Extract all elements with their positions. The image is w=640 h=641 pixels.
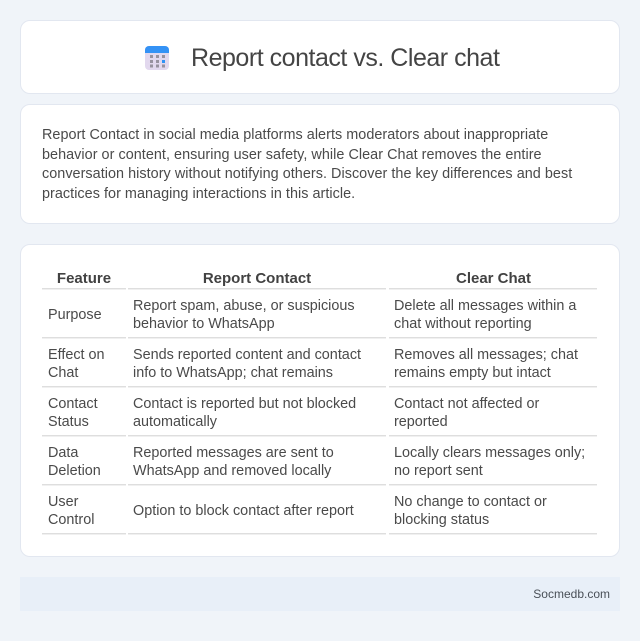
row: user control: Option to block contact after report: [133, 503, 354, 519]
row: contact status: [48, 396, 540, 430]
row: effect on chat: Chat: [48, 365, 78, 381]
row: purpose: Report spam, abuse, or suspicious: [133, 298, 355, 314]
table header: Feature: [57, 270, 111, 287]
row: data deletion: [48, 445, 585, 479]
table header: [57, 270, 531, 287]
row: purpose: Purpose: [48, 307, 102, 323]
title: Report contact vs. Clear chat: [191, 44, 499, 72]
row: data deletion: Data: [48, 445, 78, 461]
table header: Clear Chat: [456, 270, 531, 287]
row: data deletion: Locally clears messages only;: [394, 445, 585, 461]
row: user control: Control: [48, 512, 94, 528]
row: effect on chat: [48, 347, 578, 381]
row: purpose: [48, 298, 576, 332]
row: purpose: Delete all messages within a: [394, 298, 576, 314]
row: user control: [48, 494, 547, 528]
intro paragraph: practices for managing interactions in this article.: [42, 186, 355, 202]
row: purpose: behavior to WhatsApp: [133, 316, 275, 332]
row: data deletion: Reported messages are sent to: [133, 445, 334, 461]
table header: Report Contact: [203, 270, 311, 287]
row: effect on chat: Removes all messages; chat: [394, 347, 578, 363]
intro paragraph: behavior or content, ensuring user safety, while Clear Chat removes the entire: [42, 146, 542, 162]
intro paragraph: [42, 127, 572, 202]
row: effect on chat: info to WhatsApp; chat remains: [133, 365, 333, 381]
footer source label: Socmedb.com: [533, 587, 610, 601]
row: effect on chat: remains empty but intact: [394, 365, 551, 381]
row: effect on chat: Sends reported content and contact: [133, 347, 361, 363]
intro paragraph: conversation history without notifying others. Discover the key differences and best: [42, 166, 572, 182]
row: data deletion: no report sent: [394, 463, 483, 479]
row: user control: No change to contact or: [394, 494, 547, 510]
row: contact status: Status: [48, 414, 89, 430]
icon: calendar: [145, 46, 169, 70]
intro paragraph: Report Contact in social media platforms alerts moderators about inappropriate: [42, 127, 548, 143]
row: user control: User: [48, 494, 78, 510]
row: effect on chat: Effect on: [48, 347, 105, 363]
row: data deletion: Deletion: [48, 463, 101, 479]
row: contact status: Contact is reported but not blocked: [133, 396, 356, 412]
panel: title card: [20, 20, 620, 94]
row: contact status: Contact not affected or: [394, 396, 539, 412]
row: contact status: Contact: [48, 396, 98, 412]
row: data deletion: WhatsApp and removed locally: [133, 463, 331, 479]
row: contact status: reported: [394, 414, 448, 430]
row: purpose: chat without reporting: [394, 316, 532, 332]
panel: comparison table: [20, 244, 620, 557]
row: contact status: automatically: [133, 414, 217, 430]
footer bar: [20, 577, 620, 611]
panel: intro text: [20, 104, 620, 224]
row: user control: blocking status: [394, 512, 489, 528]
